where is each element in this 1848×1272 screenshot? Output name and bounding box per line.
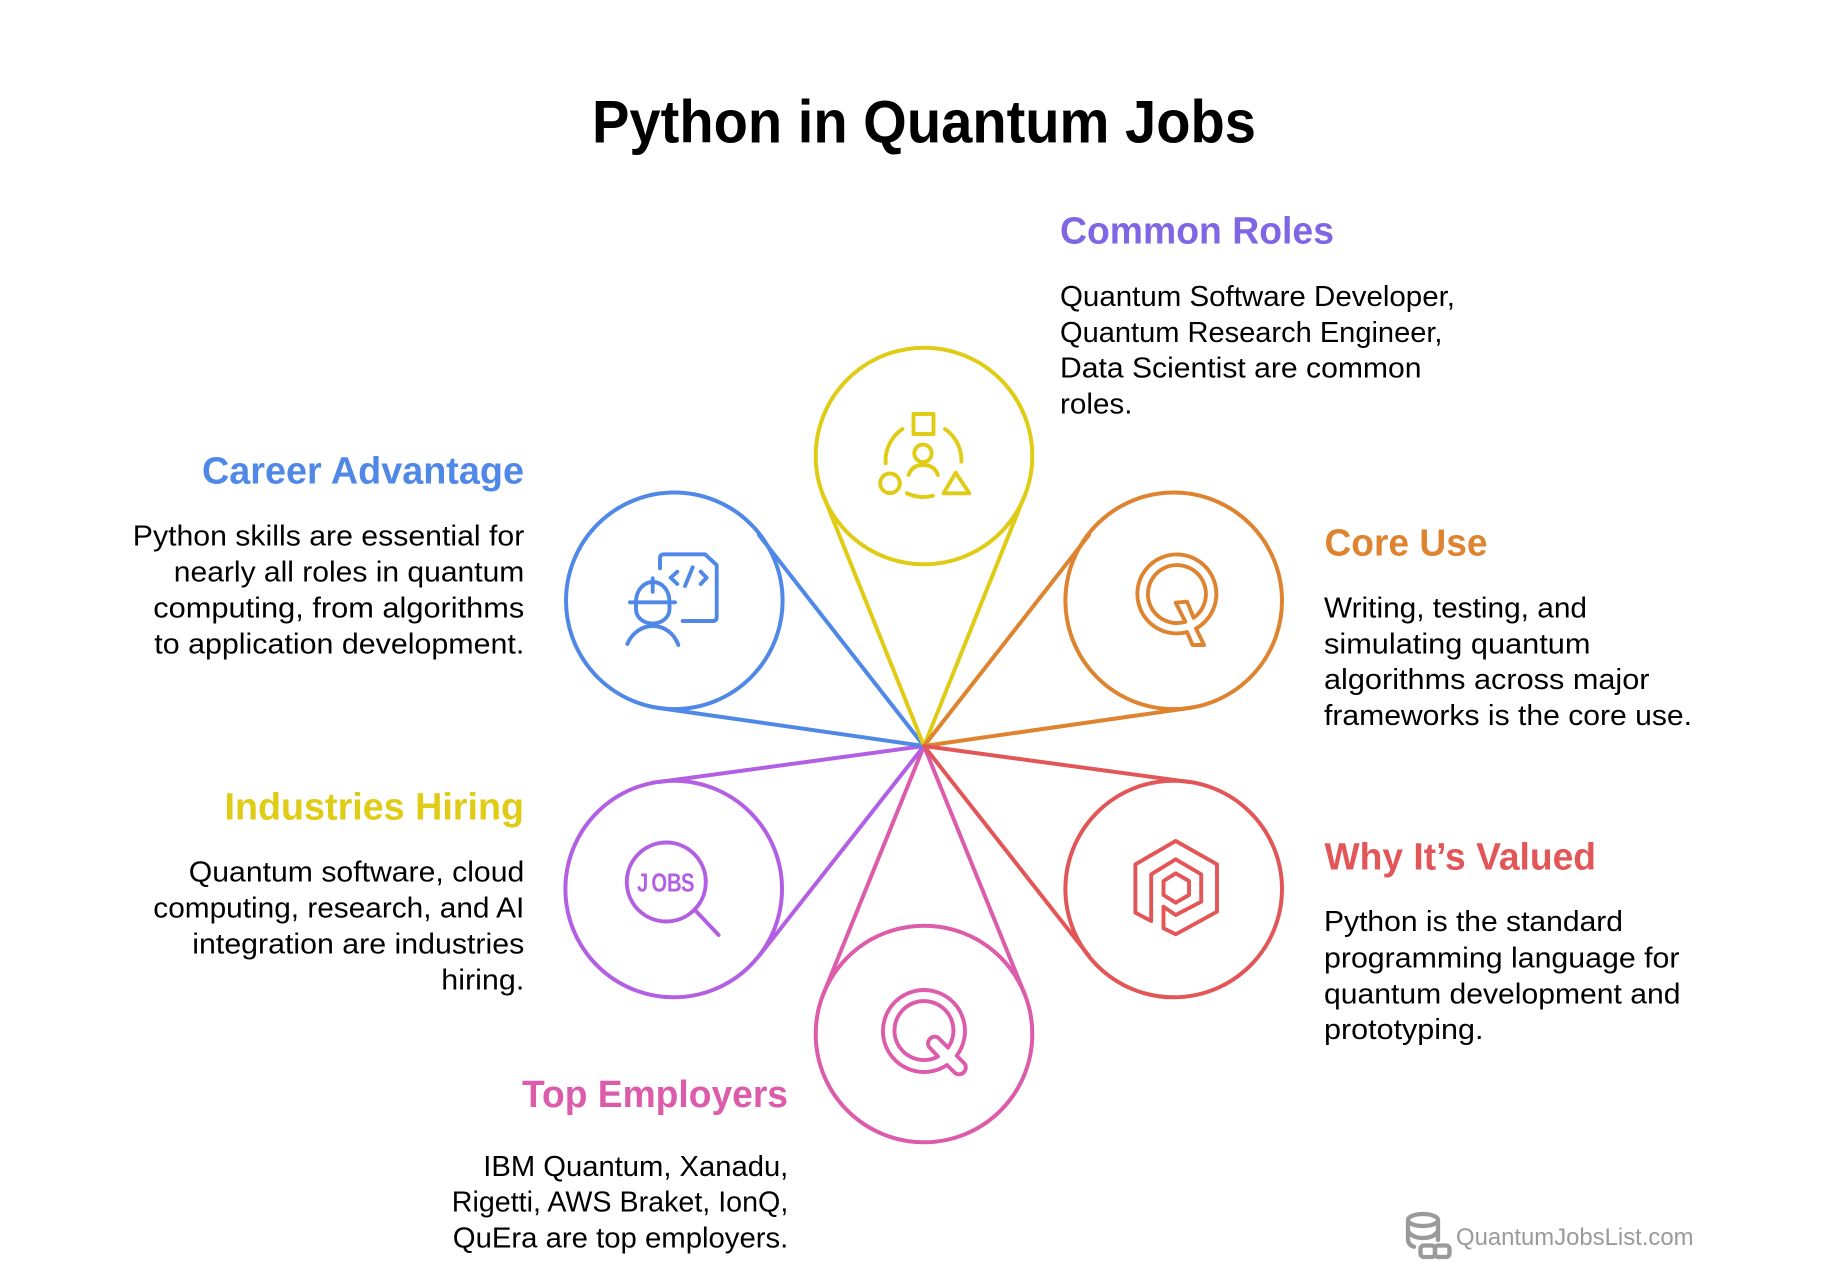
text: career advantage: computing, from algorithms [153,592,524,624]
teardrop outline: common roles [816,348,1032,746]
teardrop outline: top employers [816,746,1032,1142]
text: common roles: Quantum Research Engineer, [1060,317,1442,349]
icon: roles cycle with person and shapes [880,414,969,497]
heading: core use: Core Use [1324,523,1488,565]
icon: Q logo orange [1137,554,1216,645]
text: career advantage: nearly all roles in quantum [174,557,524,589]
title: Python in Quantum Jobs [592,89,1256,156]
icon: jobs magnifier [627,842,719,935]
text: why it's valued: programming language for [1324,942,1680,974]
text: career advantage [133,521,525,660]
text: top employers: IBM Quantum, Xanadu, [483,1151,788,1183]
text: why it's valued: quantum development and [1324,978,1680,1010]
panel: common roles [816,210,1455,746]
icon: Q logo pink [883,990,966,1074]
icon: database links [1408,1214,1450,1257]
text: common roles: Quantum Software Developer, [1060,281,1455,313]
icon: hexagon spiral [1135,841,1217,934]
panel: career advantage [133,450,924,746]
heading: career advantage: Career Advantage [202,450,524,492]
text: why it's valued [1324,906,1680,1046]
teardrop outline: why it's valued [924,746,1282,997]
panel: industries hiring [153,746,924,997]
text: why it's valued: prototyping. [1324,1014,1484,1046]
panel: top employers [452,746,1032,1254]
text: top employers [452,1151,788,1254]
text: core use: algorithms across major [1324,664,1650,696]
text: core use: frameworks is the core use. [1324,700,1692,732]
icon label: JOBS: JOBS [637,868,695,897]
text: core use [1324,592,1692,732]
heading: common roles: Common Roles [1060,210,1334,252]
text: common roles: Data Scientist are common [1060,352,1422,384]
watermark logo [1408,1214,1694,1257]
text: common roles: roles. [1060,388,1132,420]
text: why it's valued: Python is the standard [1324,906,1623,938]
panel: why it's valued [924,746,1680,1046]
text: industries hiring: computing, research, and AI [153,893,524,925]
text: common roles [1060,281,1455,420]
icon: engineer with code file [627,554,717,645]
panel: core use [924,492,1692,746]
teardrop outline: core use [924,492,1282,746]
text: top employers: QuEra are top employers. [453,1222,788,1254]
heading: top employers: Top Employers [522,1074,788,1116]
text: industries hiring: hiring. [441,964,524,996]
text: industries hiring: Quantum software, cloud [189,857,524,889]
heading: industries hiring: Industries Hiring [224,786,524,828]
text: career advantage: Python skills are essential for [133,521,525,553]
heading: why it's valued: Why It’s Valued [1324,836,1596,878]
text: industries hiring: integration are industries [192,928,524,960]
text: industries hiring [153,857,524,996]
text: core use: Writing, testing, and [1324,592,1587,624]
text: top employers: Rigetti, AWS Braket, IonQ, [452,1187,788,1219]
watermark text: QuantumJobsList.com [1456,1224,1694,1251]
text: career advantage: to application development. [154,628,524,660]
teardrop outline: industries hiring [565,746,924,997]
teardrop outline: career advantage [566,492,924,746]
text: core use: simulating quantum [1324,628,1590,660]
